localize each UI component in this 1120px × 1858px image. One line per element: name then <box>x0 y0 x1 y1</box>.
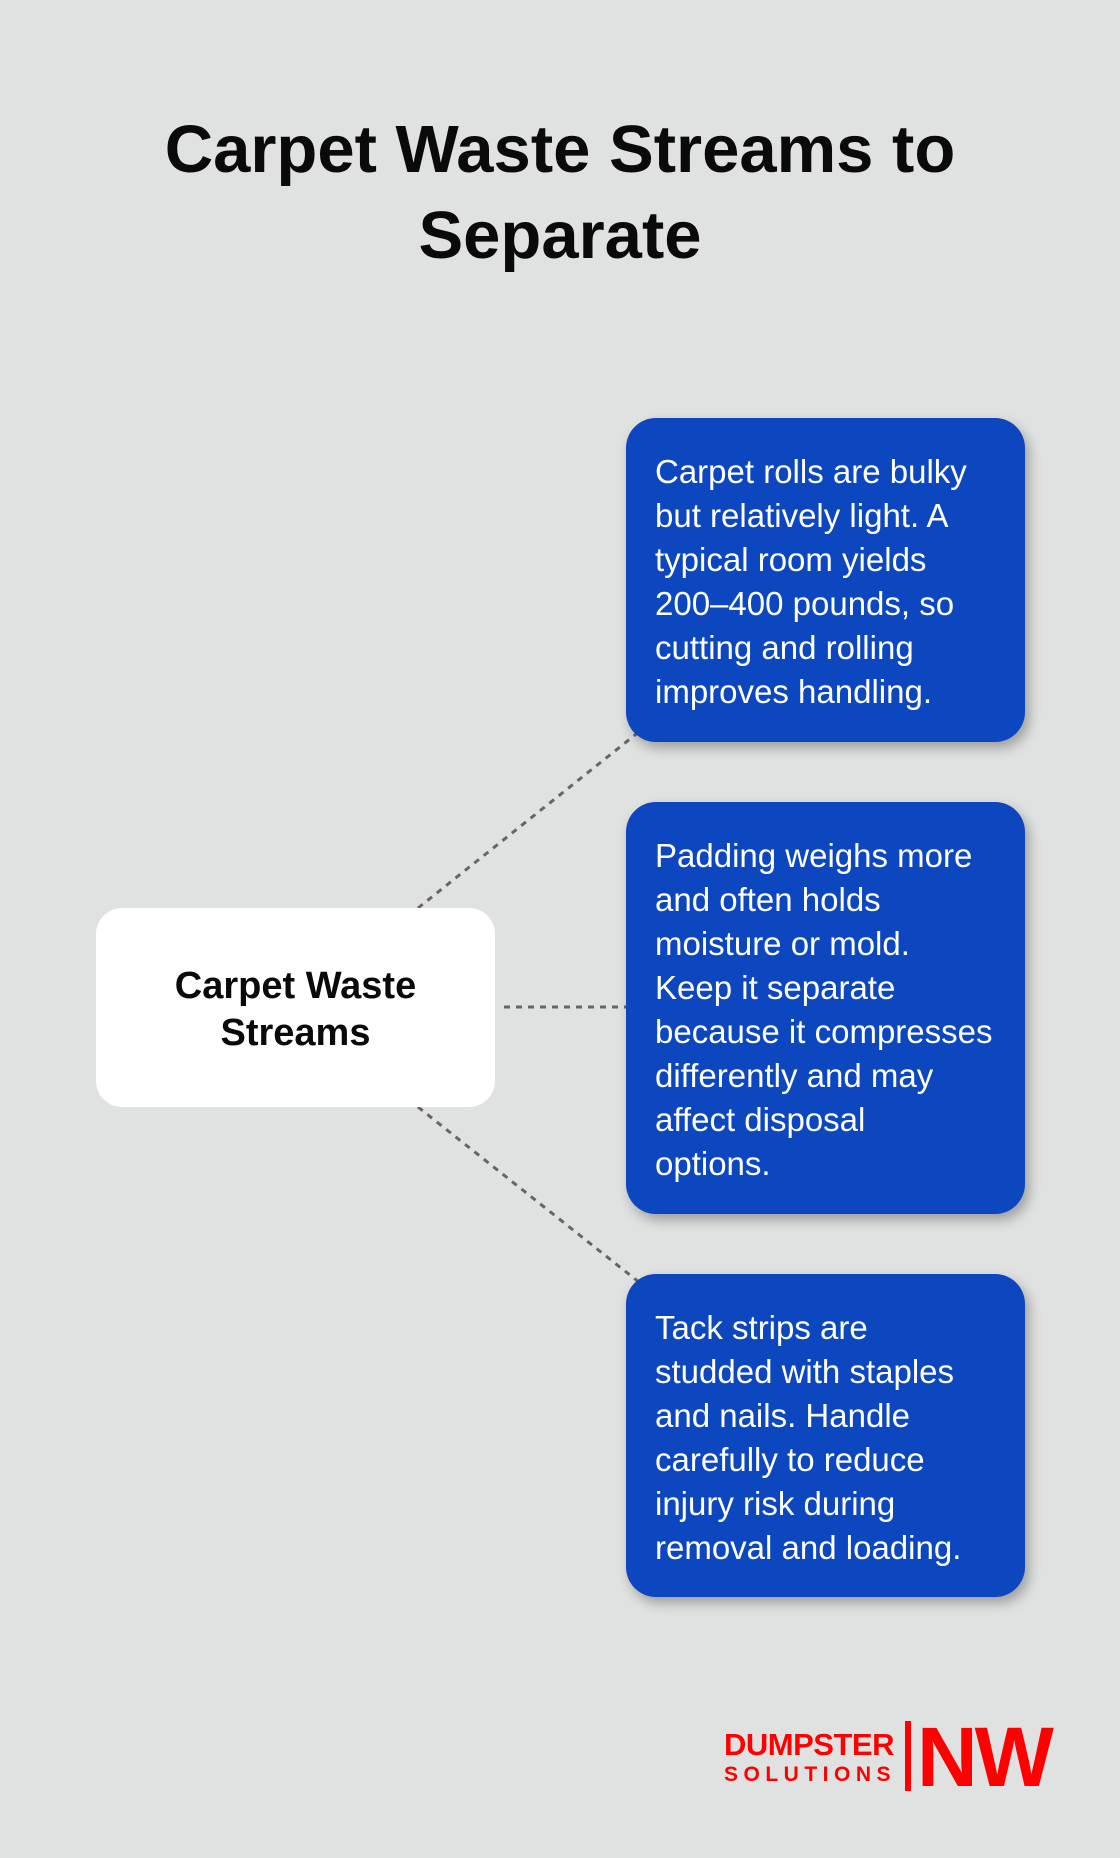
box: padding: affect disposal <box>655 1101 865 1138</box>
box: padding: and often holds <box>655 881 881 918</box>
box: padding: because it compresses <box>655 1013 992 1050</box>
box: padding: differently and may <box>655 1057 933 1094</box>
center node <box>96 908 495 1107</box>
center node: Streams <box>220 1012 370 1054</box>
logo <box>724 1710 1054 1804</box>
box: padding: Padding weighs more <box>655 837 972 874</box>
box: tack strips: studded with staples <box>655 1353 954 1390</box>
title: Separate <box>418 198 702 273</box>
box: carpet rolls: typical room yields <box>655 541 926 578</box>
logo: NW <box>917 1710 1051 1804</box>
box: tack strips: and nails. Handle <box>655 1397 910 1434</box>
box: tack strips: removal and loading. <box>655 1529 961 1566</box>
title <box>165 112 955 273</box>
box: carpet rolls: 200–400 pounds, so <box>655 585 954 622</box>
box: padding <box>626 802 1025 1214</box>
logo: DUMPSTER <box>724 1727 894 1762</box>
box: tack strips: Tack strips are <box>655 1309 868 1346</box>
box: carpet rolls <box>626 418 1025 742</box>
box: padding: Keep it separate <box>655 969 895 1006</box>
center node: Carpet Waste <box>175 964 416 1006</box>
box: carpet rolls: improves handling. <box>655 673 932 710</box>
box: padding: moisture or mold. <box>655 925 910 962</box>
box: tack strips: carefully to reduce <box>655 1441 925 1478</box>
box: carpet rolls: Carpet rolls are bulky <box>655 453 967 490</box>
box: tack strips: injury risk during <box>655 1485 895 1522</box>
box: carpet rolls: cutting and rolling <box>655 629 914 666</box>
box: tack strips <box>626 1274 1025 1597</box>
logo: SOLUTIONS <box>724 1763 896 1786</box>
box: padding: options. <box>655 1145 771 1182</box>
title: Carpet Waste Streams to <box>165 112 955 187</box>
box: carpet rolls: but relatively light. A <box>655 497 948 534</box>
